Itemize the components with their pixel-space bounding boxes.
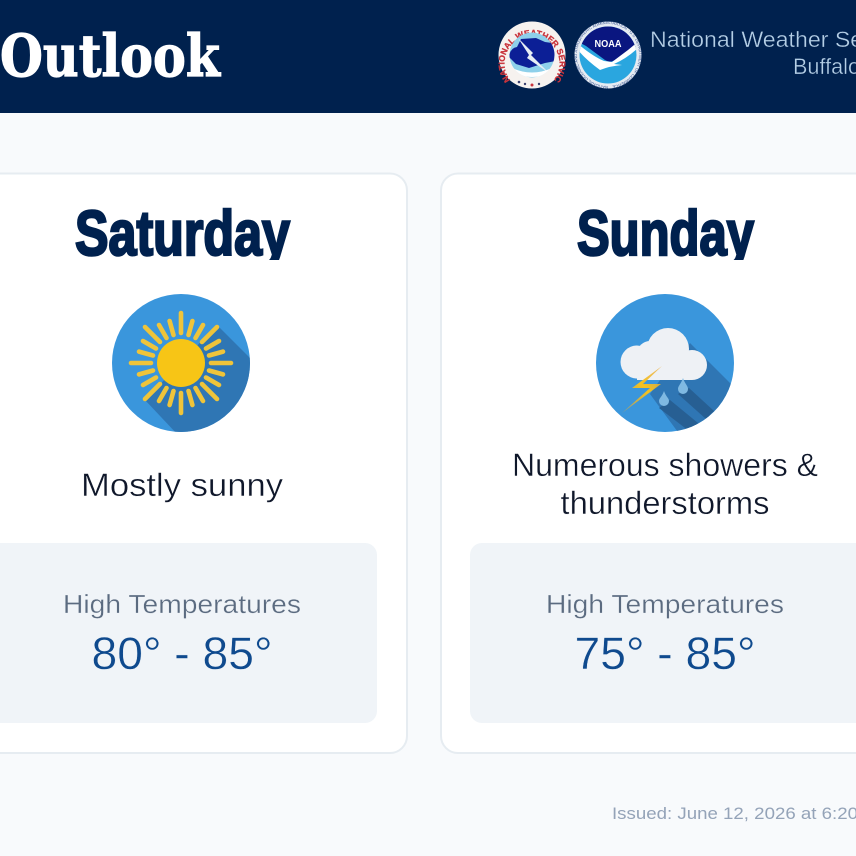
- panel: Saturday: [0, 174, 407, 753]
- icon: NOAA logo: NATIONAL OCEANIC AND ATMOSPHERIC ADMINISTRATION · U.S. DEPARTMENT OF COMMERCE: [574, 21, 642, 89]
- temperature box: High Temperatures: [63, 589, 301, 619]
- icon: sun: [112, 294, 252, 434]
- condition text: thunderstorms: [560, 485, 770, 521]
- heading: Saturday: Saturday: [75, 199, 290, 269]
- header banner: [0, 0, 856, 113]
- condition text: Mostly sunny: [81, 467, 283, 503]
- temperature box: [470, 543, 856, 723]
- icon: NOAA logo: NOAA: [594, 39, 622, 50]
- heading: Sunday: Sunday: [577, 199, 754, 269]
- title: Outlook: [0, 22, 222, 90]
- condition text: Numerous showers &: [512, 447, 818, 483]
- agency name: [650, 27, 856, 79]
- temperature box: High Temperatures: [546, 589, 784, 619]
- temperature box: 80° - 85°: [92, 628, 272, 679]
- temperature box: [0, 543, 377, 723]
- issued timestamp: Issued: June 12, 2026 at 6:20: [612, 804, 856, 823]
- icon: thunderstorm cloud: [596, 294, 737, 435]
- temperature box: 75° - 85°: [574, 628, 756, 679]
- condition text: [512, 447, 818, 521]
- panel: Sunday: [441, 174, 856, 753]
- icon: NWS logo: [498, 22, 566, 88]
